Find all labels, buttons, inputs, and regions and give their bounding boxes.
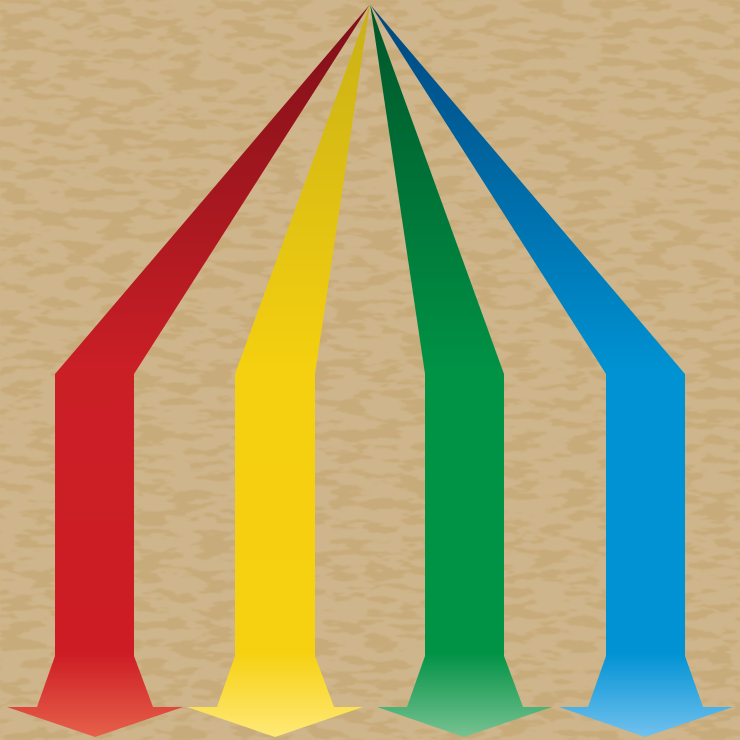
- arrow: yellow: [187, 5, 370, 737]
- arrow: green: [370, 5, 552, 737]
- arrow: blue: [370, 5, 733, 737]
- arrow: red: [7, 5, 370, 737]
